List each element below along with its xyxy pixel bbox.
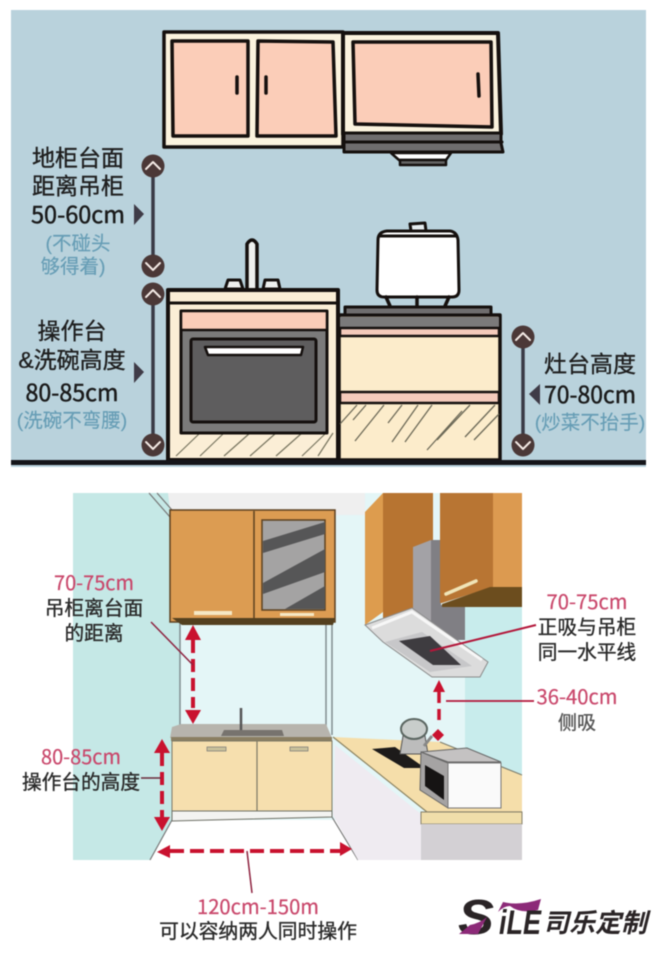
- sink cabinet with dishwasher: [168, 290, 338, 460]
- left wall cabinets: [170, 510, 335, 625]
- gas stove: [372, 747, 425, 768]
- arrow: hood to stove: [432, 680, 534, 741]
- dimension: worktop height: [134, 282, 164, 456]
- microwave: [420, 748, 501, 808]
- logo: Sile custom: 司乐定制: [543, 908, 651, 938]
- label: worktop height: 操作台的高度: [22, 772, 140, 794]
- base cabinets and sink: [150, 708, 358, 860]
- range hood: [344, 133, 503, 165]
- L-shaped counter: [333, 737, 522, 860]
- label: wall cabinet gap: 50-60cm: [31, 196, 125, 230]
- panel: kitchen perspective scene: [73, 493, 522, 860]
- label: front-draft hood: [538, 586, 636, 664]
- logo: Sile custom: [458, 891, 651, 945]
- stove cabinet: [339, 307, 500, 460]
- pot on stove: [377, 223, 459, 306]
- label: wall cabinet gap: 距离吊柜: [32, 173, 124, 199]
- label: aisle width: 120cm-150m: [197, 891, 319, 920]
- label: wall cabinet distance: 70-75cm: [54, 567, 134, 596]
- label: worktop height: 80-85cm: [26, 374, 118, 408]
- label: side-draft hood distance: 侧吸: [558, 712, 596, 734]
- left wall cabinet: [164, 32, 343, 147]
- label: stove height: 70-80cm: [544, 376, 636, 410]
- range hood: [365, 608, 488, 677]
- faucet and knobs: [225, 240, 280, 290]
- label: worktop height: 操作台: [38, 318, 106, 344]
- right wall cabinet: [343, 33, 501, 134]
- label: wall cabinet distance: [45, 567, 143, 645]
- range hood chimney: [413, 540, 465, 640]
- dimension: wall cabinet gap: [134, 154, 164, 278]
- label: wall cabinet gap: (不碰头: [46, 233, 110, 255]
- right wall cabinet beside hood: [365, 493, 433, 625]
- label: front-draft hood: 同一水平线: [538, 642, 636, 664]
- far right wall cabinet: [440, 493, 522, 607]
- logo: Sile custom: iLE: [499, 904, 542, 942]
- label: front-draft hood: 正吸与吊柜: [538, 617, 636, 639]
- label: stove height: 灶台高度: [544, 351, 636, 377]
- leader: front-draft hood: [430, 625, 536, 651]
- panel: elevation diagram background: [11, 10, 646, 467]
- label: wall cabinet distance: 吊柜离台面: [45, 598, 143, 620]
- floor line: [11, 460, 646, 465]
- label: aisle width: [159, 891, 357, 943]
- label: worktop height: [17, 318, 127, 432]
- label: worktop height: (洗碗不弯腰): [17, 410, 127, 432]
- label: wall cabinet gap: 够得着): [40, 256, 106, 278]
- arrow: aisle width: [157, 842, 352, 893]
- label: side-draft hood distance: [536, 681, 618, 734]
- label: worktop height: [22, 741, 140, 794]
- label: wall cabinet gap: [31, 145, 125, 278]
- label: front-draft hood: 70-75cm: [546, 586, 628, 615]
- label: worktop height: &洗碗高度: [18, 347, 126, 373]
- arrow: wall cabinet to counter: [151, 622, 201, 724]
- kettle: [400, 719, 432, 754]
- label: side-draft hood distance: 36-40cm: [536, 681, 618, 710]
- label: wall cabinet gap: 地柜台面: [32, 145, 124, 171]
- arrow: worktop height: [141, 739, 170, 831]
- label: stove height: [535, 351, 645, 434]
- label: wall cabinet distance: 的距离: [64, 623, 124, 645]
- label: aisle width: 可以容纳两人同时操作: [159, 921, 357, 943]
- label: stove height: (炒菜不抬手): [535, 412, 645, 434]
- label: worktop height: 80-85cm: [41, 741, 121, 770]
- logo: Sile custom: S: [458, 891, 494, 945]
- dimension: stove height: [512, 326, 540, 456]
